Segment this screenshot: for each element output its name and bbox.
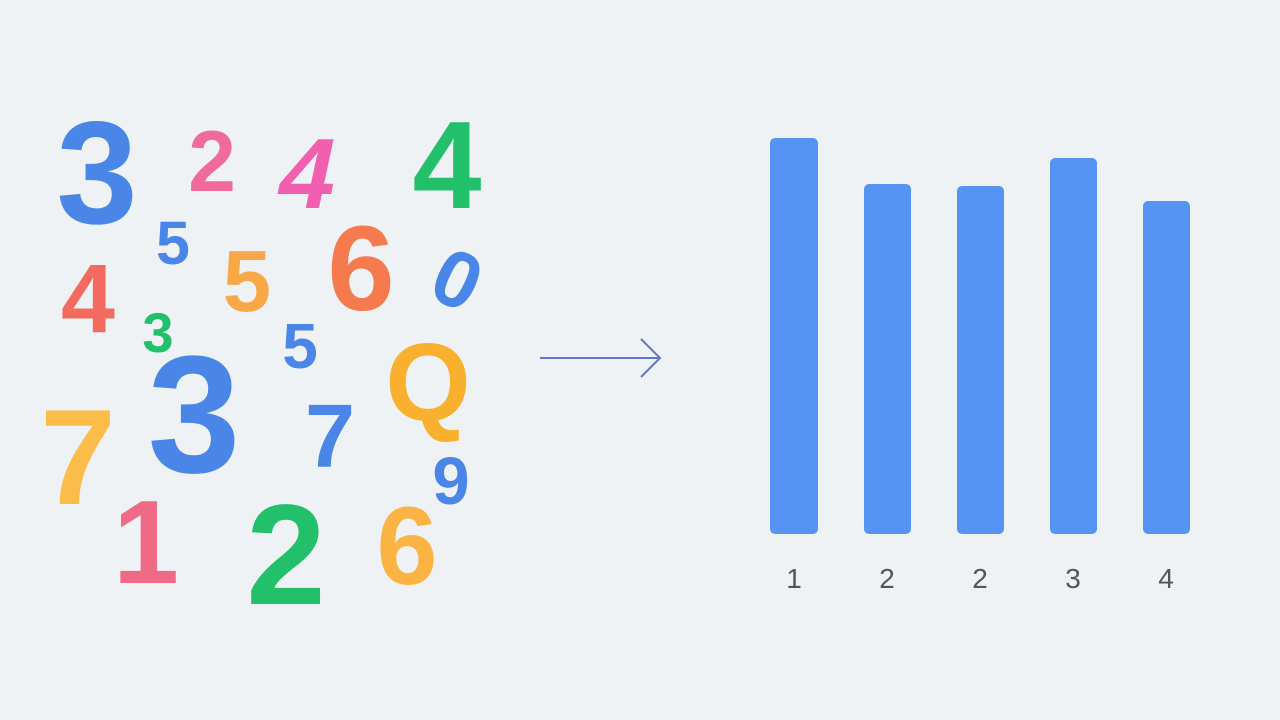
number 4 salmon: 4 (61, 244, 115, 353)
bar 4 (1050, 158, 1097, 534)
panel: scattered numbers (40, 91, 496, 635)
number 1 pink: 1 (113, 476, 179, 609)
number 5 blue small: 5 (156, 209, 190, 277)
axis labels: 4 (1158, 563, 1174, 594)
number 7 orange: 7 (40, 381, 116, 533)
number 4 green: 4 (413, 97, 481, 235)
number 9 blue: 9 (432, 444, 470, 519)
number 7 blue: 7 (305, 387, 355, 487)
bar 1 (770, 138, 818, 534)
number 3 green small: 3 (142, 301, 174, 364)
bar chart (770, 138, 1190, 594)
axis labels: 2 (879, 563, 895, 594)
bar 3 (957, 186, 1004, 534)
number 6 orange: 6 (376, 485, 438, 608)
axis labels: 1 (786, 563, 802, 594)
axis labels: 2 (972, 563, 988, 594)
number 5 blue: 5 (282, 310, 318, 382)
axis labels: 3 (1065, 563, 1081, 594)
glyph Q orange: Q (385, 321, 471, 444)
number 2 green: 2 (246, 476, 326, 635)
axis labels (786, 563, 1174, 594)
number 6 orange-red: 6 (327, 200, 395, 336)
number 3 blue: 3 (56, 91, 138, 254)
number 2 pink: 2 (188, 114, 236, 210)
bar 2 (864, 184, 911, 534)
arrow (540, 338, 662, 378)
number 3 blue large: 3 (148, 322, 240, 508)
bar 5 (1143, 201, 1190, 534)
number 0 blue rotated: 0 (418, 230, 496, 329)
number 5 orange: 5 (223, 233, 271, 330)
number 4 pink: 4 (268, 118, 348, 230)
